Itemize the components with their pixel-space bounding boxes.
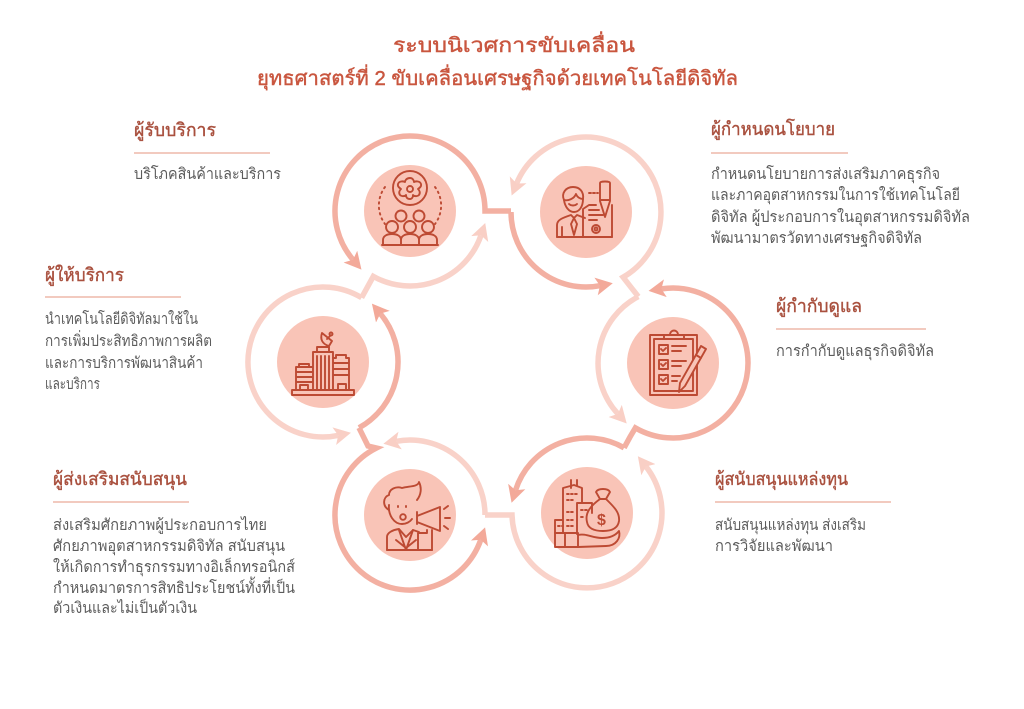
icon: clipboard checklist and pen [627,317,719,409]
arrow: ring 2 light arc [517,137,661,297]
panel: promoters and supporters [53,469,295,617]
panel: funding supporters [715,469,891,555]
icon: people and gear [364,165,456,257]
arrow: ring 2 dark arc [511,212,600,287]
panel: promoters and supporters: ศักยภาพอุตสาหกรรมดิจิทัล สนับสนุน [53,538,285,556]
panel: funding supporters: การวิจัยและพัฒนา [715,538,833,555]
panel: service recipients: ผู้รับบริการ [134,120,216,141]
icon: man with megaphone [364,469,456,561]
panel: promoters and supporters: ส่งเสริมศักยภาพผู้ประกอบการไทย [53,516,267,535]
panel: policy makers: ผู้กำหนดนโยบาย [711,118,835,140]
panel: policy makers: พัฒนามาตรวัดทางเศรษฐกิจดิจิทัล [711,230,922,247]
arrow: ring 4 dark arc [516,438,624,490]
arrow: ring 6 light arc [248,287,362,437]
panel: service providers: และบริการ [45,376,100,393]
arrow: ring 4 light arc [485,466,662,588]
panel: funding supporters: ผู้สนับสนุนแหล่งทุน [715,469,848,490]
cycle diagram rings and arrows [248,136,748,590]
panel: policy makers: กำหนดนโยบายการส่งเสริมภาคธุรกิจ [711,165,940,184]
panel: service providers: และการบริการพัฒนาสินค้า [45,355,203,372]
panel: promoters and supporters: ตัวเงินและไม่เป็นตัวเงิน [53,598,197,617]
panel: promoters and supporters: กำหนดมาตรการสิทธิประโยชน์ทั้งที่เป็น [53,576,295,597]
arrow: ring 1 dark arc [335,136,511,260]
panel: regulators: ผู้กำกับดูแล [776,296,862,317]
arrow: ring 6 dark arc [359,314,398,428]
arrow: ring 3 light arc [598,297,638,414]
icon: buildings with money bag [541,467,633,559]
panel: service providers: การเพิ่มประสิทธิภาพการผลิต [45,330,212,350]
title: ยุทธศาสตร์ที่ 2 ขับเคลื่อนเศรษฐกิจด้วยเทคโนโลยีดิจิทัล [257,64,738,91]
title [257,31,738,91]
arrow: ring 3 dark arc [624,288,748,448]
icon: policy maker with document and pen [540,166,632,258]
panel: policy makers: และภาคอุตสาหกรรมในการใช้เทคโนโลยี [711,186,960,205]
panel: regulators: การกำกับดูแลธุรกิจดิจิทัล [776,343,934,361]
panel: service recipients [134,120,281,183]
panel: policy makers [711,118,970,247]
panel: policy makers: ดิจิทัล ผู้ประกอบการในอุตสาหกรรมดิจิทัล [711,208,970,227]
panel: promoters and supporters: ให้เกิดการทำธุรกรรมทางอิเล็กทรอนิกส์ [53,557,295,577]
panel: service providers: ผู้ให้บริการ [45,264,124,286]
icon: buildings with money bag: $ [597,512,606,529]
panel: promoters and supporters: ผู้ส่งเสริมสนับสนุน [53,469,187,490]
panel: service recipients: บริโภคสินค้าและบริการ [134,165,281,183]
panel: service providers: นำเทคโนโลยีดิจิทัลมาใช้ใน [45,310,198,328]
panel: funding supporters: สนับสนุนแหล่งทุน ส่งเสริม [715,517,866,535]
arrow: ring 5 light arc [396,440,485,515]
title: ระบบนิเวศการขับเคลื่อน [393,31,635,57]
arrow: ring 5 dark arc [335,428,481,590]
arrow: ring 1 light arc [362,235,481,298]
panel: service providers [45,264,212,393]
panel: regulators [776,296,934,361]
icon: office buildings with satellite dish [277,316,369,408]
